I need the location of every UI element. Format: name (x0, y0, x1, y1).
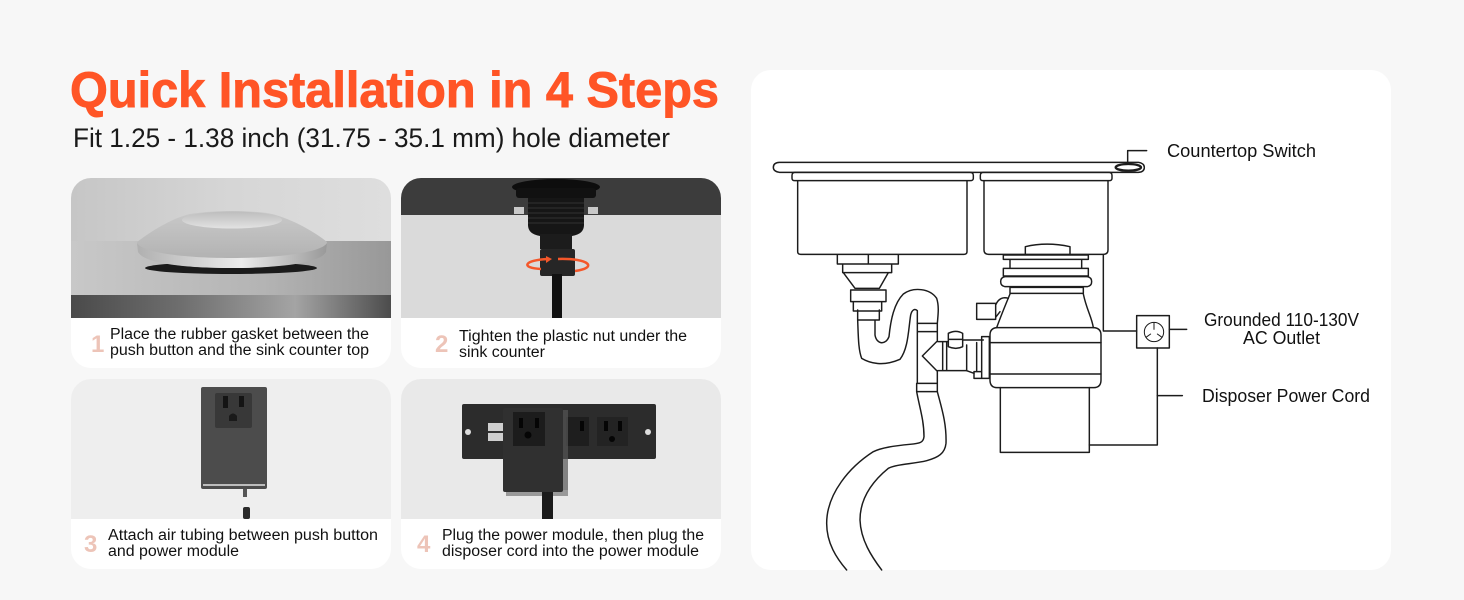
left sink basin (792, 172, 973, 254)
step text 4 (442, 527, 704, 560)
step text 2 (459, 330, 686, 357)
icon: countertop switch (1116, 151, 1147, 171)
panel: step 4 (401, 379, 721, 569)
right sink basin (980, 172, 1112, 254)
panel: step 3 (71, 379, 391, 569)
step text 4: disposer cord into the power module (442, 543, 699, 560)
subtitle: Fit 1.25 - 1.38 inch (31.75 - 35.1 mm) hole diameter (73, 123, 670, 153)
disposer drain cap (1025, 244, 1070, 254)
step number 4: 4 (417, 531, 431, 558)
step text 2: Tighten the plastic nut under the (459, 328, 687, 345)
panel: step 2 (401, 178, 721, 368)
diagram: sinks and countertop (773, 151, 1147, 254)
step number 2: 2 (435, 331, 448, 358)
diagram: disposer unit (977, 255, 1101, 452)
step text 1: push button and the sink counter top (110, 342, 369, 359)
step text 3 (108, 527, 378, 560)
step text 3: and power module (108, 543, 239, 560)
icon: outlet (1137, 316, 1169, 348)
photo: push button on counter (71, 178, 391, 318)
photo: power module plugged into outlet strip (401, 379, 721, 519)
diagram: trap, tee and discharge hose (827, 289, 989, 570)
label: outlet (1204, 310, 1359, 348)
diagram: drain fitting (837, 255, 898, 311)
step text 3: Attach air tubing between push button (108, 527, 378, 544)
step text 2: sink counter (459, 344, 545, 361)
photo: plastic nut under counter (401, 178, 721, 318)
label: power cord: Disposer Power Cord (1202, 386, 1370, 406)
step number 3: 3 (84, 531, 97, 558)
photo: power module with air nozzle (71, 379, 391, 519)
label: outlet: Grounded 110-130V (1204, 310, 1359, 330)
step text 1 (110, 326, 369, 359)
diagram: wiring and outlet (1089, 255, 1187, 445)
icon: orange rotation arrow (527, 256, 588, 271)
label: outlet: AC Outlet (1243, 328, 1320, 348)
title: Quick Installation in 4 Steps (70, 62, 719, 118)
label: countertop switch: Countertop Switch (1167, 141, 1316, 161)
step text 4: Plug the power module, then plug the (442, 527, 704, 544)
step text 1: Place the rubber gasket between the (110, 326, 369, 343)
panel: step 1 (71, 178, 391, 368)
step number 1: 1 (91, 331, 104, 358)
panel: installation diagram (751, 70, 1391, 570)
